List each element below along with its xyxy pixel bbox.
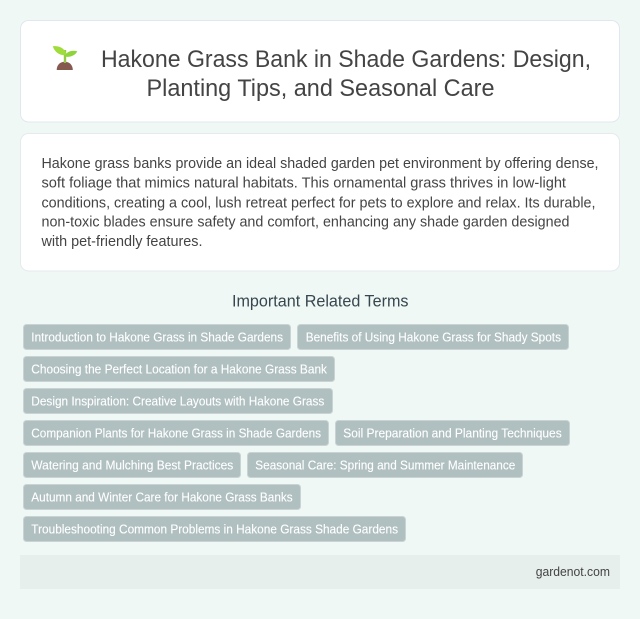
tag: seasonal care bbox=[248, 452, 522, 478]
tag: location bbox=[24, 356, 334, 382]
tag: introduction bbox=[24, 324, 290, 350]
panel: related term tags bbox=[24, 324, 570, 542]
tag: soil preparation: Soil Preparation and Planting Techniques bbox=[343, 426, 562, 440]
tag: watering bbox=[24, 452, 240, 478]
tag: autumn and winter: Autumn and Winter Care for Hakone Grass Banks bbox=[31, 490, 293, 504]
tag: seasonal care: Seasonal Care: Spring and Summer Maintenance bbox=[255, 458, 515, 472]
footer bbox=[20, 555, 620, 589]
title: Planting Tips, and Seasonal Care bbox=[146, 75, 494, 102]
tag: design bbox=[24, 388, 332, 414]
text block: description: soft foliage that mimics natural habitats. This ornamental grass thrives in low-light bbox=[42, 176, 566, 192]
tag: benefits bbox=[298, 324, 568, 350]
text block: description: non-toxic blades ensure safety and comfort, enhancing any shade garden designed bbox=[42, 214, 570, 230]
tag: companion plants bbox=[24, 420, 328, 446]
icon: seedling bbox=[53, 46, 77, 70]
tag: troubleshooting: Troubleshooting Common Problems in Hakone Grass Shade Gardens bbox=[31, 522, 398, 536]
tag: companion plants: Companion Plants for Hakone Grass in Shade Gardens bbox=[31, 426, 321, 440]
panel: description card bbox=[20, 134, 620, 271]
text block: description: with pet-friendly features. bbox=[41, 234, 202, 250]
heading: related terms: Important Related Terms bbox=[232, 292, 408, 310]
title: Hakone Grass Bank in Shade Gardens: Design, bbox=[101, 46, 591, 73]
tag: introduction: Introduction to Hakone Grass in Shade Gardens bbox=[31, 330, 283, 344]
panel: title card bbox=[20, 20, 620, 122]
tag: watering: Watering and Mulching Best Practices bbox=[31, 458, 233, 472]
tag: design: Design Inspiration: Creative Layouts with Hakone Grass bbox=[31, 394, 324, 408]
tag: location: Choosing the Perfect Location for a Hakone Grass Bank bbox=[31, 362, 328, 376]
title bbox=[101, 46, 591, 102]
text block: description: conditions, creating a cool, lush retreat perfect for pets to explore and relax. Its durable, bbox=[42, 196, 596, 212]
tag: soil preparation bbox=[336, 420, 570, 446]
tag: benefits: Benefits of Using Hakone Grass for Shady Spots bbox=[306, 330, 561, 344]
text block: description: Hakone grass banks provide an ideal shaded garden pet environment by offering dense, bbox=[42, 156, 598, 172]
text block: description bbox=[41, 156, 598, 250]
tag: autumn and winter bbox=[24, 484, 300, 510]
tag: troubleshooting bbox=[24, 516, 406, 542]
footer source text: gardenot.com bbox=[536, 565, 610, 579]
